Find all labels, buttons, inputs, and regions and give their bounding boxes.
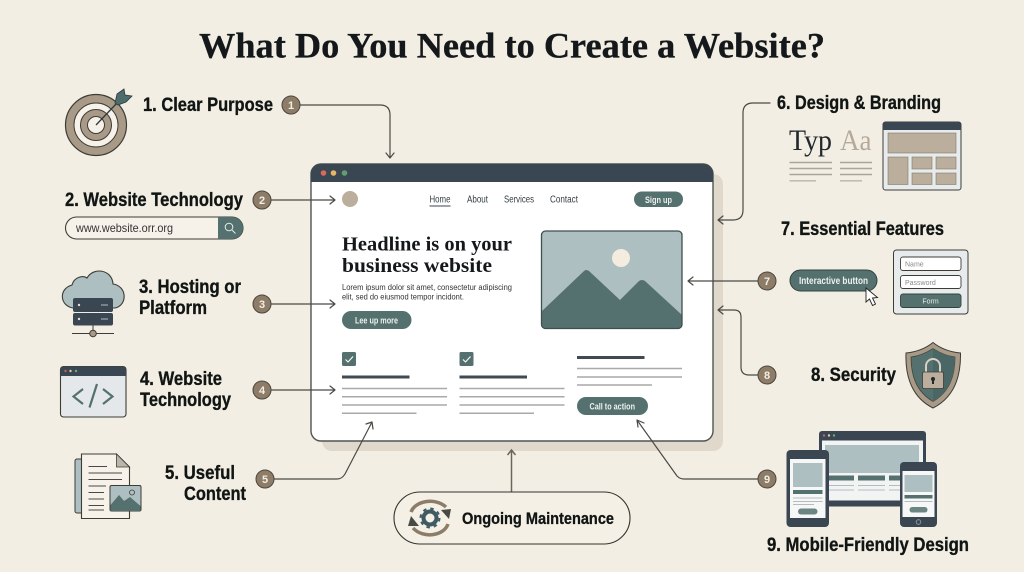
badge 9: 9: [764, 474, 770, 486]
body copy: [342, 283, 512, 302]
title bar: [311, 164, 713, 182]
label 8: 8. Security: [811, 364, 896, 386]
label 5: 5. Useful: [165, 462, 235, 484]
arrow 5: [274, 422, 373, 479]
typography sample: Typ: [789, 124, 832, 157]
label 6: 6. Design & Branding: [777, 92, 941, 114]
badge 4: [253, 381, 271, 399]
badge 4: 4: [259, 385, 266, 397]
feature column 2: [460, 352, 564, 413]
label 7: 7. Essential Features: [781, 218, 944, 240]
navigation: Services: [504, 194, 534, 206]
form mockup: [894, 250, 968, 314]
label 1: 1. Clear Purpose: [143, 94, 273, 116]
badge 7: 7: [764, 276, 770, 288]
arrow 4: [271, 386, 335, 394]
headline: [342, 234, 512, 277]
form mockup: Name: [905, 262, 924, 268]
label 4: Technology: [140, 389, 231, 411]
body copy: elit, sed do eiusmod tempor incidont.: [342, 292, 464, 302]
icon: gear and cycle arrows: [408, 501, 451, 535]
label 3: [139, 276, 241, 319]
hero image: [542, 231, 682, 328]
arrow 6: [718, 103, 770, 224]
arrow 1: [300, 105, 394, 158]
badge 5: 5: [262, 474, 268, 486]
right phone: [900, 462, 937, 527]
arrow 3: [271, 300, 335, 308]
typography sample: [789, 124, 872, 181]
badge 7: [758, 272, 776, 290]
label 3: 3. Hosting or: [139, 276, 241, 298]
label 2: 2. Website Technology: [65, 189, 243, 211]
badge 3: [253, 295, 271, 313]
arrow 2: [271, 196, 335, 204]
headline: business website: [342, 255, 492, 277]
navigation: Home: [430, 194, 451, 206]
arrow 7: [688, 277, 758, 285]
navigation: Contact: [550, 194, 578, 206]
label 4: 4. Website: [140, 368, 222, 390]
badge 8: 8: [764, 370, 770, 382]
learn more button: Lee up more: [355, 316, 398, 326]
badge 1: 1: [288, 100, 294, 112]
icon: document with image: [75, 454, 141, 518]
label 5: [165, 462, 246, 505]
desktop monitor: [819, 431, 926, 506]
label 4: [140, 368, 231, 411]
badge 5: [256, 470, 274, 488]
headline: Headline is on your: [342, 234, 512, 256]
label 9: 9. Mobile-Friendly Design: [767, 534, 969, 556]
sign up button: [634, 192, 683, 207]
icon: responsive devices: [786, 431, 937, 527]
badge 2: 2: [259, 195, 265, 207]
learn more button: [342, 311, 412, 329]
search bar: [66, 217, 243, 239]
title: What Do You Need to Create a Website?: [199, 26, 825, 66]
maintenance label: Ongoing Maintenance: [462, 509, 614, 528]
call to action button: Call to action: [590, 402, 635, 412]
arrow maintenance: [508, 450, 516, 492]
call to action button: [577, 397, 648, 415]
interactive button: Interactive button: [799, 276, 868, 287]
form mockup: Form: [922, 298, 939, 306]
ongoing maintenance pill: [394, 492, 630, 544]
badge 8: [758, 366, 776, 384]
icon: target: [66, 89, 132, 156]
navigation: [430, 194, 578, 206]
window dots: [321, 170, 347, 176]
interactive button: [790, 270, 878, 306]
arrow 8: [718, 306, 758, 375]
feature column 3: [577, 356, 682, 385]
label 5: Content: [184, 483, 246, 505]
panel: website mockup: [311, 164, 723, 451]
typography sample: Aa: [840, 124, 872, 157]
logo circle: [342, 191, 358, 207]
label 3: Platform: [139, 297, 207, 319]
navigation: About: [467, 194, 488, 206]
search bar: www.website.orr.org: [75, 221, 173, 235]
arrow 9: [637, 420, 758, 479]
layout wireframe: [883, 122, 961, 190]
badge 2: [253, 191, 271, 209]
body copy: Lorem ipsum dolor sit amet, consectetur adipiscing: [342, 283, 512, 292]
icon: cursor: [866, 288, 878, 306]
badge 9: [758, 470, 776, 488]
icon: cloud server: [62, 271, 124, 337]
feature column 1: [342, 352, 447, 413]
icon: shield with lock: [906, 342, 961, 408]
icon: code window: [60, 366, 126, 417]
left phone: [786, 450, 829, 527]
badge 1: [282, 96, 300, 114]
form mockup: Password: [905, 280, 936, 287]
browser window: [311, 164, 713, 441]
sign up button: Sign up: [645, 195, 672, 206]
badge 3: 3: [259, 299, 265, 311]
window shadow: [322, 174, 723, 451]
